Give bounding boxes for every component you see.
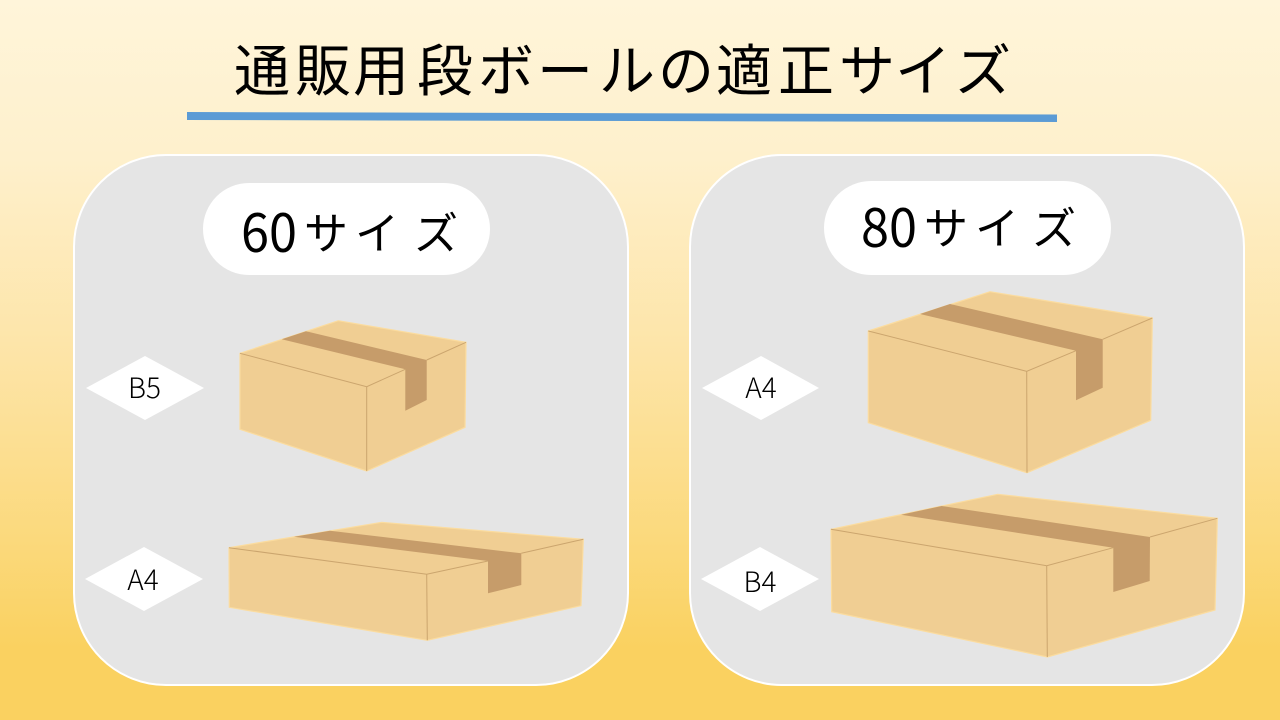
heading pill: 60 size (203, 183, 490, 275)
label: B5 (86, 356, 204, 420)
label: A4: A4 (127, 559, 159, 599)
box: 60 size B5 (240, 321, 466, 471)
label: B4 (701, 547, 819, 611)
panel: 80 size (690, 155, 1244, 685)
box: 80 size B4 (831, 494, 1217, 657)
label: A4 (702, 356, 819, 420)
title underline (187, 112, 1057, 122)
panel: 60 size (74, 155, 628, 685)
label: B5: B5 (128, 367, 161, 407)
heading pill: 60 size: サイズ (304, 198, 458, 262)
label: B4: B4 (744, 561, 776, 601)
title: 通販用段ボールの適正サイズ (234, 27, 1011, 108)
heading pill: 80 size: サイズ (924, 193, 1076, 257)
label: A4: A4 (745, 367, 777, 407)
box: 60 size A4 (229, 522, 583, 640)
box: 80 size A4 (868, 292, 1152, 473)
heading pill: 80 size (824, 181, 1111, 275)
label: A4 (85, 547, 203, 611)
heading pill: 80 size: 80 (861, 187, 917, 263)
heading pill: 60 size: 60 (241, 192, 297, 268)
